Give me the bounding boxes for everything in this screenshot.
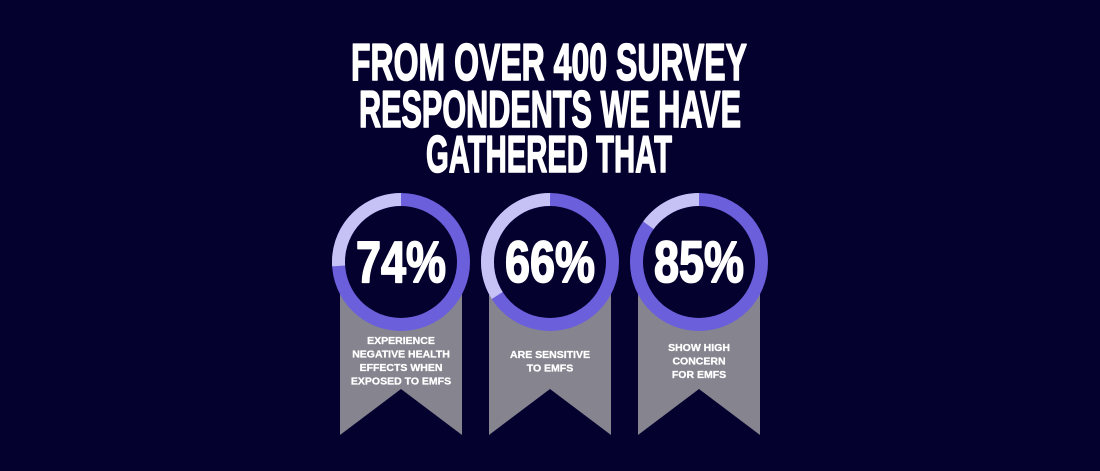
label: FOR EMFS: [672, 369, 726, 381]
ring: [464, 176, 636, 348]
label: [668, 342, 730, 381]
ring: [332, 193, 470, 331]
label: EFFECTS WHEN: [360, 362, 442, 374]
title: [351, 34, 747, 184]
title: RESPONDENTS WE HAVE: [359, 81, 741, 139]
title: FROM OVER 400 SURVEY: [351, 34, 747, 92]
badge: 74%: [332, 193, 470, 435]
ribbon: [489, 262, 611, 435]
ribbon: [638, 262, 760, 435]
label: NEGATIVE HEALTH: [352, 348, 450, 360]
percentage: 66%: [505, 230, 595, 295]
label: CONCERN: [672, 356, 726, 368]
label: TO EMFS: [527, 362, 573, 374]
ring: [612, 175, 786, 349]
label: [351, 335, 451, 388]
label: EXPERIENCE: [367, 335, 435, 347]
percentage: 74%: [356, 230, 446, 295]
label: ARE SENSITIVE: [510, 349, 590, 361]
label: SHOW HIGH: [668, 342, 730, 354]
badge: 85%: [612, 175, 786, 435]
ribbon: [340, 262, 462, 435]
title: GATHERED THAT: [426, 126, 672, 184]
badge: 66%: [464, 176, 636, 435]
label: [510, 349, 590, 374]
percentage: 85%: [654, 230, 744, 295]
label: EXPOSED TO EMFS: [351, 376, 451, 388]
